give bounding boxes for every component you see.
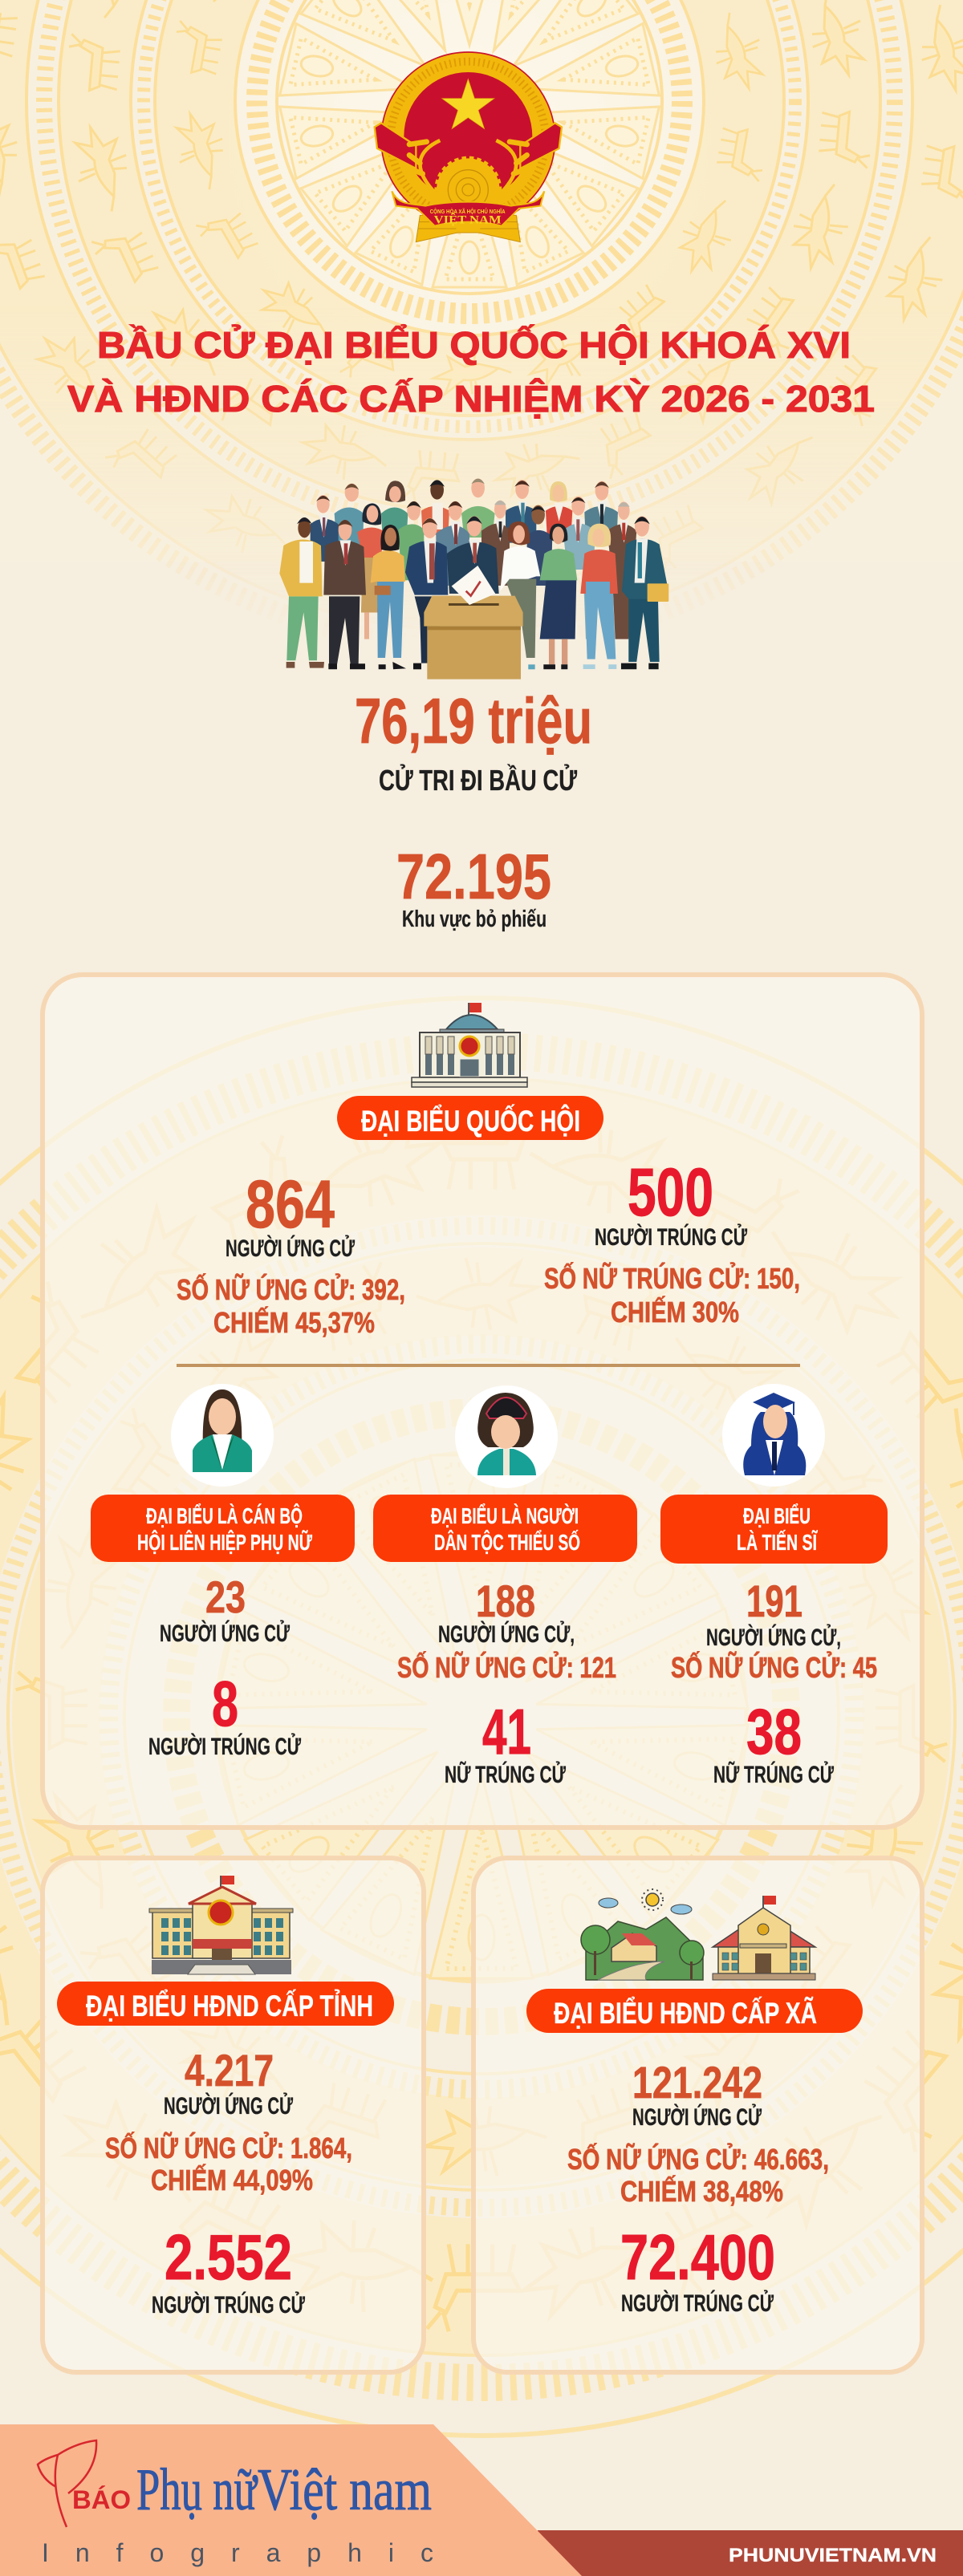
background: lower bronze drum pattern — [0, 998, 963, 2436]
heading pill: National Assembly — [337, 1096, 603, 1140]
icon: National Assembly building — [412, 1003, 527, 1087]
stats: commune council: CHIẾM 38,48% — [620, 2175, 783, 2208]
label: ethnic minority delegates: DÂN TỘC THIỂU SỐ — [434, 1529, 580, 1555]
star — [442, 79, 494, 129]
icon: ethnic minority delegate avatar — [455, 1385, 558, 1488]
icon: women's union delegate avatar — [171, 1384, 274, 1487]
label: women's union delegates: ĐẠI BIỂU LÀ CÁN BỘ — [146, 1503, 303, 1528]
icon: village and commune hall — [581, 1889, 815, 1980]
footer: newspaper logo block — [0, 2424, 582, 2576]
title — [67, 324, 875, 420]
stats: ethnic minority column: 188 — [476, 1576, 535, 1626]
back row — [335, 478, 618, 554]
icon: doctorate delegate avatar — [722, 1384, 825, 1487]
stats: doctorate column — [671, 1576, 877, 1788]
headline stat: polling areas: Khu vực bỏ phiếu — [402, 907, 547, 932]
title: VÀ HĐND CÁC CẤP NHIỆM KỲ 2026 - 2031 — [67, 378, 875, 420]
ballot box — [424, 566, 523, 679]
headline stat: voters — [355, 685, 592, 797]
footer band: website — [538, 2530, 963, 2576]
heading pill: provincial council: ĐẠI BIỂU HĐND CẤP TỈNH — [86, 1989, 373, 2022]
heading pill: provincial council — [57, 1982, 394, 2026]
stats: ethnic minority column: 41 — [482, 1696, 531, 1767]
national emblem of Vietnam: VIỆT NAM — [434, 213, 502, 226]
stats: provincial council: SỐ NỮ ỨNG CỬ: 1.864, — [105, 2131, 352, 2164]
footer: newspaper logo block: Phụ nữ — [136, 2457, 258, 2523]
stat: NA elected — [544, 1154, 800, 1329]
label: women's union delegates: HỘI LIÊN HIỆP PHỤ NỮ — [137, 1529, 313, 1555]
footer: newspaper logo block: Infographic — [42, 2538, 433, 2567]
stat: NA candidates: SỐ NỮ ỨNG CỬ: 392, — [177, 1272, 405, 1306]
stats: doctorate column: 38 — [746, 1696, 802, 1767]
icon: tulip logo mark — [38, 2440, 96, 2527]
stats: commune council: SỐ NỮ ỨNG CỬ: 46.663, — [567, 2142, 829, 2176]
stat: NA elected: SỐ NỮ TRÚNG CỬ: 150, — [544, 1261, 800, 1295]
stats: women's union column: NGƯỜI ỨNG CỬ — [160, 1620, 290, 1647]
stats: women's union column — [148, 1572, 301, 1760]
label: doctorate delegates: LÀ TIẾN SĨ — [737, 1530, 819, 1555]
stats: commune council: 121.242 — [632, 2057, 762, 2107]
stat: NA candidates: CHIẾM 45,37% — [213, 1306, 375, 1339]
heading pill: National Assembly: ĐẠI BIỂU QUỐC HỘI — [361, 1104, 580, 1138]
stat: NA candidates: NGƯỜI ỨNG CỬ — [226, 1235, 355, 1262]
heading pill: commune council: ĐẠI BIỂU HĐND CẤP XÃ — [554, 1996, 817, 2030]
label: women's union delegates — [91, 1495, 355, 1562]
stats: provincial council: CHIẾM 44,09% — [151, 2164, 313, 2197]
banner — [392, 191, 544, 226]
stats: women's union column: NGƯỜI TRÚNG CỬ — [148, 1733, 301, 1760]
stats: doctorate column: 191 — [746, 1576, 802, 1626]
stats: commune council: 72.400 — [620, 2221, 775, 2293]
stats: provincial council — [105, 2045, 352, 2318]
title: BẦU CỬ ĐẠI BIỂU QUỐC HỘI KHOÁ XVI — [97, 324, 851, 366]
label: ethnic minority delegates — [373, 1495, 637, 1562]
stats: ethnic minority column: SỐ NỮ ỨNG CỬ: 121 — [397, 1650, 616, 1684]
label: ethnic minority delegates: ĐẠI BIỂU LÀ NGƯỜI — [431, 1503, 579, 1528]
footer: newspaper logo block: Việt nam — [258, 2457, 432, 2523]
stats: provincial council: 2.552 — [165, 2221, 292, 2293]
stats: commune council: NGƯỜI ỨNG CỬ — [632, 2103, 762, 2131]
stats: ethnic minority column — [397, 1576, 616, 1788]
icon: provincial government building — [149, 1876, 293, 1974]
stats: doctorate column: SỐ NỮ ỨNG CỬ: 45 — [671, 1650, 877, 1684]
stat: NA elected: 500 — [628, 1154, 713, 1230]
base — [416, 215, 520, 242]
panel: National Assembly — [43, 975, 922, 1828]
stat: NA candidates: 864 — [246, 1166, 335, 1242]
stats: ethnic minority column: NỮ TRÚNG CỬ — [445, 1761, 566, 1788]
label: doctorate delegates — [660, 1495, 888, 1564]
headline stat: voters: CỬ TRI ĐI BẦU CỬ — [379, 763, 577, 797]
headline stat: polling areas: 72.195 — [396, 841, 551, 912]
panel: provincial council — [43, 1858, 424, 2372]
label: doctorate delegates: ĐẠI BIỂU — [743, 1503, 811, 1528]
stat: NA elected: CHIẾM 30% — [611, 1296, 739, 1329]
stats: provincial council: NGƯỜI ỨNG CỬ — [164, 2092, 293, 2120]
middle row — [311, 495, 636, 639]
stats: commune council — [567, 2057, 829, 2317]
front row — [279, 516, 668, 669]
footer: newspaper logo block: BÁO — [72, 2485, 131, 2514]
stats: ethnic minority column: NGƯỜI ỨNG CỬ, — [438, 1621, 575, 1648]
footer band: website: PHUNUVIETNAM.VN — [729, 2545, 937, 2566]
stat: NA elected: NGƯỜI TRÚNG CỬ — [595, 1223, 747, 1251]
stats: women's union column: 23 — [205, 1572, 246, 1622]
stats: provincial council: 4.217 — [185, 2045, 274, 2095]
stats: doctorate column: NGƯỜI ỨNG CỬ, — [706, 1624, 841, 1651]
panel: commune council — [473, 1858, 922, 2372]
headline stat: polling areas — [396, 841, 551, 932]
heading pill: commune council — [526, 1989, 863, 2033]
stats: doctorate column: NỮ TRÚNG CỬ — [713, 1761, 834, 1788]
national emblem of Vietnam: CỘNG HÒA XÃ HỘI CHỦ NGHĨA — [430, 208, 506, 215]
stat: NA candidates — [177, 1166, 405, 1339]
background: upper bronze drum pattern — [0, 0, 963, 647]
illustration: crowd of voters with ballot box — [279, 478, 668, 679]
stats: women's union column: 8 — [212, 1668, 238, 1739]
stats: commune council: NGƯỜI TRÚNG CỬ — [621, 2290, 774, 2317]
stats: provincial council: NGƯỜI TRÚNG CỬ — [152, 2291, 305, 2318]
headline stat: voters: 76,19 triệu — [355, 685, 592, 757]
national emblem of Vietnam — [375, 52, 562, 242]
